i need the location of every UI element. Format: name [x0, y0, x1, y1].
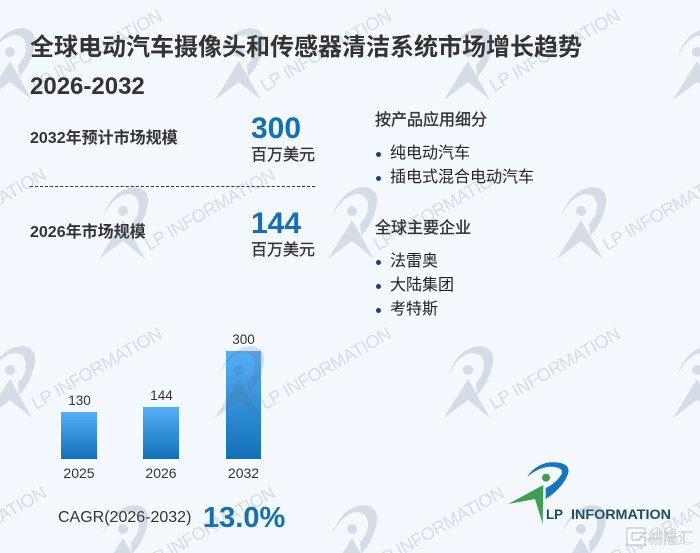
panel: key companies	[375, 219, 471, 318]
value: 300: 300	[251, 112, 301, 145]
background watermark pattern: LP INFORMATION	[486, 5, 624, 95]
subtitle: years: 2026-2032	[30, 73, 145, 100]
background watermark pattern: LP INFORMATION	[28, 5, 166, 95]
list item: 插电式混合电动汽车	[390, 169, 534, 186]
bar 2025: 2025	[63, 465, 95, 481]
bullet	[376, 152, 381, 157]
logo: LP Information: LP	[546, 506, 563, 522]
background watermark pattern: LP INFORMATION	[257, 323, 395, 413]
bar 2032: 2032	[228, 465, 259, 481]
background watermark pattern: LP INFORMATION	[141, 164, 279, 254]
bullet	[376, 284, 381, 289]
bar 2026: 2026	[145, 465, 177, 481]
panel: product segments	[375, 111, 534, 186]
list item: 法雷奥	[390, 253, 438, 270]
list item: 大陆集团	[390, 277, 454, 294]
bar 2025	[61, 393, 97, 481]
bar 2026	[143, 388, 179, 481]
background watermark pattern: LP INFORMATION	[257, 5, 395, 95]
value: 144: 144	[251, 207, 301, 240]
source watermark: Gelonghui: 格隆汇	[648, 530, 693, 547]
background watermark pattern: LP INFORMATION	[370, 164, 508, 254]
unit: 2032 value: 百万美元	[251, 147, 315, 164]
bar 2032: 300	[232, 332, 255, 347]
unit: 2026 value: 百万美元	[251, 242, 315, 259]
background watermark pattern: LP INFORMATION	[28, 323, 166, 413]
bullet	[376, 308, 381, 313]
heading: key companies: 全球主要企业	[375, 220, 471, 237]
label: 2026 market size: 2026年市场规模	[30, 224, 146, 241]
heading: product segments: 按产品应用细分	[375, 112, 487, 129]
list item: 考特斯	[390, 301, 438, 318]
label: 2032 market size: 2032年预计市场规模	[30, 130, 178, 147]
logo: LP Information: INFORMATION	[571, 506, 671, 522]
bullet	[376, 260, 381, 265]
bar 2032	[226, 332, 261, 481]
list item: 纯电动汽车	[390, 145, 470, 162]
CAGR value: 13.0%	[203, 502, 285, 534]
title: 全球电动汽车摄像头和传感器清洁系统市场增长趋势	[30, 34, 582, 61]
bar 2026: 144	[150, 388, 173, 403]
bar 2025: 130	[68, 393, 91, 408]
bullet	[376, 176, 381, 181]
CAGR label: CAGR(2026-2032)	[58, 509, 191, 526]
background watermark pattern: LP INFORMATION	[486, 323, 624, 413]
